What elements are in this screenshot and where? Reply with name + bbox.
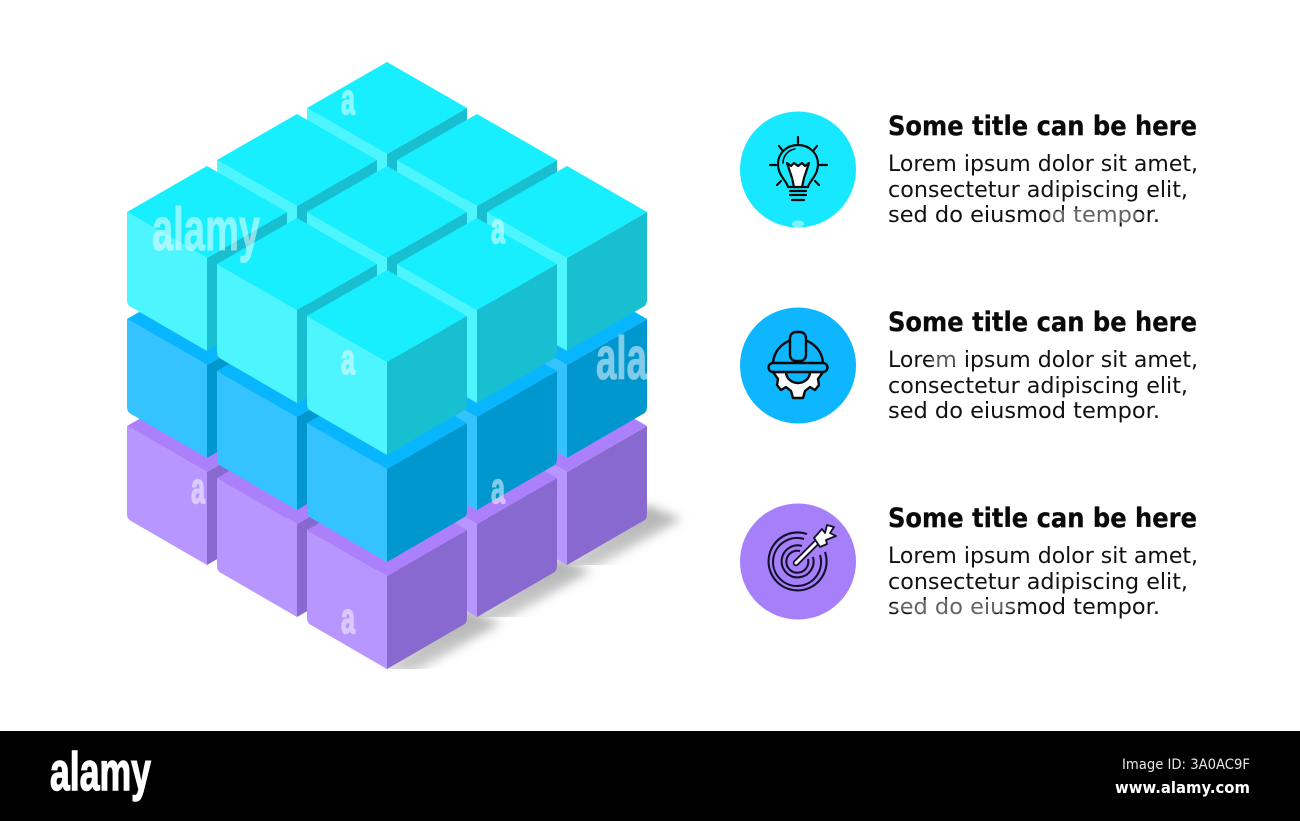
text block — [888, 544, 1198, 620]
logo: alamy — [50, 742, 151, 802]
footer bar — [0, 731, 1300, 821]
watermarks on cube: a — [491, 464, 505, 513]
text block: consectetur adipiscing elit, — [888, 570, 1188, 595]
watermarks on cube: a — [191, 464, 205, 513]
text block: sed do eiusmod tempor. — [888, 203, 1160, 228]
watermarks on cube: alamy — [152, 196, 260, 263]
watermarks on cube: a — [341, 594, 355, 643]
text block: consectetur adipiscing elit, — [888, 178, 1188, 203]
text block — [888, 348, 1198, 424]
icon: target with arrow — [740, 504, 856, 620]
item 3 — [740, 503, 1198, 620]
watermarks on cube: a — [341, 75, 355, 124]
icon: light bulb — [740, 112, 856, 228]
watermarks on cube: ala — [596, 325, 647, 392]
text block: sed do eiusmod tempor. — [888, 399, 1160, 424]
bottom layer: purple cubes — [127, 276, 647, 669]
icon: helmet with gear — [740, 308, 856, 424]
text block: consectetur adipiscing elit, — [888, 374, 1188, 399]
title: Some title can be here — [888, 503, 1197, 534]
text block: Lorem ipsum dolor sit amet, — [888, 348, 1198, 373]
top layer: cyan cubes — [127, 62, 647, 455]
text block: Lorem ipsum dolor sit amet, — [888, 544, 1198, 569]
watermarks on cube — [152, 75, 647, 643]
text block: sed do eiusmod tempor. — [888, 595, 1160, 620]
text block: Lorem ipsum dolor sit amet, — [888, 152, 1198, 177]
isometric cube chart — [127, 62, 682, 672]
watermarks on cube: a — [341, 335, 355, 384]
middle layer: blue cubes — [127, 169, 647, 562]
item 1 — [740, 111, 1198, 228]
image id: Image ID: 3A0AC9F — [1122, 757, 1250, 773]
website: www.alamy.com — [1115, 778, 1250, 797]
title: Some title can be here — [888, 111, 1197, 142]
item 2 — [740, 307, 1198, 424]
text block — [888, 152, 1198, 228]
cube shadow — [380, 505, 682, 672]
title: Some title can be here — [888, 307, 1197, 338]
watermarks on cube: a — [491, 204, 505, 253]
